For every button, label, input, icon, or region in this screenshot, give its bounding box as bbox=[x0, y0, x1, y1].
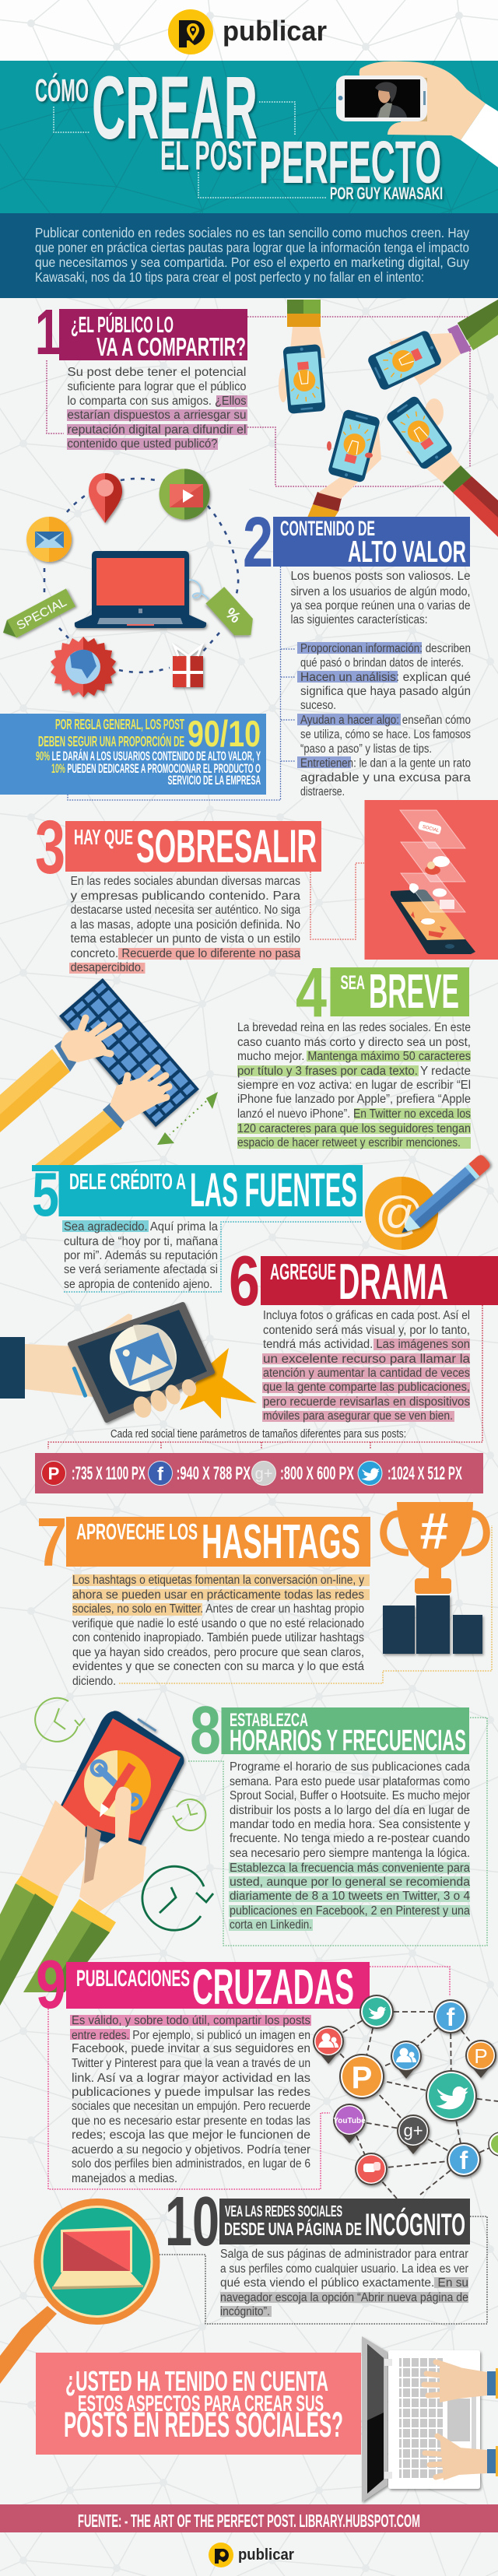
phone bbox=[391, 890, 475, 954]
node: twitter big bbox=[426, 2070, 477, 2122]
icon: twitter bbox=[358, 1462, 382, 1485]
icon: map pin bbox=[89, 473, 122, 523]
panel: social image sizes: :800 X 600 PX bbox=[280, 1463, 354, 1484]
illustration: phone, tools and clocks bbox=[0, 1698, 213, 2006]
text: step 7: ahora se pueden usar en prácticamente todas las redes bbox=[72, 1588, 364, 1602]
heading: step 1: 1 bbox=[35, 296, 61, 368]
text: step 4: mucho mejor. Mantenga máximo 50 caracteres bbox=[237, 1050, 471, 1063]
node: chat bbox=[355, 2153, 388, 2185]
icon: pinterest: P bbox=[48, 1464, 59, 1483]
node: pinterest big: P bbox=[352, 2061, 372, 2095]
icon: pinterest bbox=[42, 1462, 65, 1485]
text: step 9: redes; escoja las que mejor le funcionen de bbox=[72, 2129, 310, 2142]
dashed route bbox=[44, 479, 238, 672]
heading: step 2 bbox=[243, 503, 470, 582]
text: step 7: con contenido inapropiado. También puede utilizar hashtags bbox=[72, 1631, 364, 1644]
icon: facebook bbox=[148, 1462, 173, 1485]
icon: clock large bbox=[142, 1866, 213, 1930]
text: step 9: Facebook, puede invitar a sus seguidores en bbox=[72, 2042, 310, 2055]
icon: google plus bbox=[252, 1462, 275, 1485]
heading: step 1 bbox=[35, 296, 247, 368]
header logo: publicar bbox=[223, 15, 327, 47]
node: facebook bottom: f bbox=[460, 2146, 468, 2174]
node: pinterest small: P bbox=[474, 2044, 488, 2068]
icon: email bbox=[26, 517, 72, 562]
node: youtube bbox=[333, 2104, 366, 2143]
title: EL POST bbox=[160, 133, 256, 179]
text: step 2: Entretienen: le dan a la gente un rato bbox=[300, 757, 471, 770]
text: step 6: un excelente recurso para llamar la bbox=[263, 1353, 470, 1366]
text: step 4: espacio de hacer retweet y escribir menciones. bbox=[237, 1136, 461, 1149]
text: step 5: cultura de “hoy por ti, mañana bbox=[64, 1235, 218, 1248]
icon: clock medium bbox=[173, 1799, 205, 1830]
text: step 1: Su post debe tener el potencial bbox=[67, 366, 246, 379]
heading: step 4 bbox=[296, 954, 469, 1032]
panel: intro bbox=[0, 213, 498, 298]
text: step 2: distraerse. bbox=[300, 785, 345, 798]
text: step 6: atención y aumentar la cantidad de veces bbox=[263, 1367, 470, 1380]
heading: step 9: PUBLICACIONES bbox=[76, 1966, 190, 1992]
icon: globe badge bbox=[51, 637, 116, 697]
text: step 2: sirven a los usuarios de algún modo, bbox=[291, 585, 470, 598]
text: step 9: Twitter y Pinterest para que la vean a través de un bbox=[72, 2057, 310, 2070]
text: step 7: que ya hayan sido creados, pero procure que sean claros, bbox=[72, 1646, 364, 1659]
text: step 1: lo comparta con sus amigos. ¿Ellos bbox=[67, 395, 247, 408]
icon: percent tag bbox=[205, 587, 260, 644]
text: step 8: publicaciones en Facebook, 2 en Pinterest y una bbox=[230, 1904, 470, 1918]
phone bottom-left bbox=[307, 409, 381, 518]
footer logo: publicar bbox=[238, 2546, 294, 2564]
heading: step 10: 10 bbox=[165, 2183, 219, 2261]
illustration: magnifier with laptop bbox=[0, 2199, 160, 2384]
intro text bbox=[35, 225, 469, 285]
text: step 3: a las masas, adopte una posición definida. No bbox=[71, 918, 300, 932]
heading: step 10: VEA LAS REDES SOCIALES bbox=[225, 2203, 342, 2220]
node: google plus bbox=[397, 2114, 430, 2154]
text: step 6: que la gente comparte las publicaciones, bbox=[263, 1381, 470, 1394]
layers bbox=[400, 810, 465, 912]
text: step 7: evidentes y que se conecten con su marca y lo que está bbox=[72, 1660, 364, 1673]
text: step 2: suceso. bbox=[300, 699, 336, 712]
node: pinterest big bbox=[339, 2054, 384, 2099]
heading: step 7: APROVECHE LOS bbox=[76, 1520, 198, 1545]
text: step 10: qué esta viendo el público exactamente. En su bbox=[220, 2276, 468, 2290]
heading: step 6 bbox=[229, 1242, 498, 1321]
heading: step 10 bbox=[165, 2183, 470, 2261]
text: step 9: acuerdo a su negocio y objetivos. Podría tener bbox=[72, 2143, 310, 2157]
text: step 6: tendrá más actividad. Las imágenes son bbox=[263, 1338, 470, 1351]
illustration: hands on keyboard bbox=[0, 978, 218, 1165]
text: step 9: que no es necesario estar presente en todas las bbox=[72, 2114, 310, 2128]
callout: 90/10 rule: 90% LE DARÁN A LOS USUARIOS CONTENIDO DE ALTO VALOR, Y bbox=[36, 749, 261, 763]
heading: step 6: 6 bbox=[229, 1242, 260, 1321]
text: step 3: destacarse usted necesita ser auténtico. No siga bbox=[71, 904, 300, 917]
text: step 9: publicaciones y puede impulsar las redes bbox=[72, 2086, 310, 2099]
illustration: hand holding phone with Guy Kawasaki bbox=[336, 61, 498, 167]
node: people red bbox=[313, 2026, 344, 2064]
text: step 4: siempre en voz activa: en lugar de escribir “El bbox=[237, 1079, 471, 1092]
callout: 90/10 rule: SERVICIO DE LA EMPRESA bbox=[168, 773, 261, 788]
callout: closing question: ¿USTED HA TENIDO EN CUENTA bbox=[65, 2365, 328, 2397]
heading: step 5: DELE CRÉDITO A bbox=[69, 1168, 186, 1195]
icon: special ribbon bbox=[0, 588, 75, 642]
hands bbox=[0, 1787, 146, 2006]
panel: social image sizes: :735 X 1100 PX bbox=[72, 1463, 146, 1484]
tools icon bbox=[84, 1750, 151, 1817]
text: step 10 bbox=[160, 2216, 487, 2324]
icon: video bbox=[159, 469, 210, 520]
panel: social image sizes bbox=[35, 1453, 483, 1493]
heading: step 8: ESTABLEZCA bbox=[230, 1710, 308, 1731]
text: step 2: las siguientes características: bbox=[291, 613, 428, 626]
icon: gift bbox=[173, 646, 203, 687]
text: step 3: desapercibido. bbox=[71, 961, 144, 974]
text: step 10: navegador escoja la opción “Abrir nueva página de bbox=[220, 2291, 468, 2304]
text: step 8: frecuente. No tenga miedo a re-postear cuando bbox=[230, 1832, 470, 1845]
text: step 1: contenido que usted publicó? bbox=[67, 437, 218, 451]
text: step 2: “paso a paso” y listas de tips. bbox=[300, 742, 432, 756]
text: step 5: se verá seriamente afectada si bbox=[64, 1263, 218, 1276]
title: CREAR bbox=[92, 58, 258, 158]
heading: step 8 bbox=[190, 1693, 469, 1768]
header logo bbox=[168, 9, 327, 54]
text: step 9: entre redes. Por ejemplo, si publicó un imagen en bbox=[72, 2029, 310, 2042]
callout: 90/10 rule: 90/10 bbox=[188, 713, 261, 754]
icon: google plus: g+ bbox=[255, 1465, 272, 1483]
icon: laptop bbox=[75, 551, 209, 628]
text: step 2: significa que haya pasado algún bbox=[300, 685, 471, 698]
text: step 9: solo dos perfiles bien administrados, en lugar de 6 bbox=[72, 2157, 310, 2171]
text: step 4: Y redacte bbox=[420, 1065, 471, 1078]
node: green partial bbox=[489, 2132, 498, 2156]
icon: clock small bbox=[35, 1698, 85, 1742]
text: step 3: En las redes sociales abundan diversas marcas bbox=[71, 875, 300, 888]
node: youtube: YouTube bbox=[333, 2117, 366, 2125]
network connectors bbox=[328, 2012, 498, 2199]
heading: step 2: 2 bbox=[243, 503, 273, 582]
illustration: hand with image phone bbox=[0, 1304, 257, 1420]
callout: 90/10 rule: 10% PUEDEN DEDICARSE A PROMOCIONAR EL PRODUCTO O bbox=[51, 761, 261, 776]
text: step 5: se apropia de contenido ajeno. bbox=[64, 1278, 212, 1291]
footer: source band bbox=[0, 2504, 498, 2532]
text: step 6: contenido será más visual y, por lo tanto, bbox=[263, 1324, 470, 1337]
heading: step 9 bbox=[36, 1946, 450, 2023]
text: step 6: móviles para asegurar que se ven bien. bbox=[263, 1409, 453, 1423]
upper arm and hand bbox=[0, 1018, 119, 1132]
illustration: four hands with idea phones bbox=[247, 300, 498, 537]
text: step 9: sociales que necesitan un empujón. Pero recuerde bbox=[72, 2100, 310, 2113]
illustration: social network nodes bbox=[313, 1995, 498, 2199]
text: step 8: diariamente de 8 a 10 tweets en Twitter, 3 o 4 bbox=[230, 1890, 470, 1903]
node: facebook bottom bbox=[447, 2143, 481, 2177]
text: step 7: sociales, no solo en Twitter. Antes de crear un hashtag propio bbox=[72, 1602, 364, 1616]
heading: step 6: AGREGUE bbox=[270, 1260, 336, 1285]
heading: step 2: CONTENIDO DE bbox=[280, 517, 375, 540]
phone bbox=[51, 1711, 184, 1851]
text: step 4: caso cuanto más corto y directo sea un post, bbox=[237, 1036, 471, 1049]
icon: burst bbox=[180, 1348, 257, 1419]
text: step 5: Sea agradecido. Aquí prima la bbox=[64, 1220, 218, 1234]
text: step 8: Programe el horario de sus publicaciones cada bbox=[230, 1760, 470, 1774]
illustration: laptop from above with hands bbox=[362, 2336, 498, 2502]
text: step 7: verifique que nadie lo esté usando o que no esté relacionado bbox=[72, 1617, 364, 1630]
illustration: hashtag trophy bbox=[383, 1502, 486, 1654]
text: step 10: a sus perfiles como cualquier usuario. La idea es ver bbox=[220, 2262, 468, 2276]
dotted connectors in header bbox=[54, 102, 327, 198]
heading: step 1: ¿EL PÚBLICO LO bbox=[71, 311, 174, 338]
text: step 8: corta en Linkedin. bbox=[230, 1918, 312, 1932]
node: twitter teal bbox=[359, 1995, 394, 2029]
text: step 4: por título y 3 frases por cada texto. bbox=[237, 1065, 418, 1078]
lower arm and hand bbox=[35, 1068, 169, 1165]
text: step 3 bbox=[69, 863, 364, 974]
text: step 6: pero recuerde revisarlas en dispositivos bbox=[263, 1395, 470, 1409]
panel: social media layered phone bbox=[364, 800, 498, 960]
text: step 2: agradable y una excusa para bbox=[300, 771, 471, 784]
text: step 8: semana. Para esto puede usar plataformas como bbox=[230, 1775, 470, 1788]
footer logo bbox=[209, 2543, 294, 2567]
text: step 4: La brevedad reina en las redes sociales. En este bbox=[237, 1021, 471, 1034]
text: step 9: manejados a medias. bbox=[72, 2172, 177, 2185]
heading: step 7: 7 bbox=[37, 1504, 67, 1581]
node: pinterest small bbox=[465, 2040, 496, 2078]
heading: step 7 bbox=[37, 1504, 370, 1581]
text: step 7: diciendo. bbox=[72, 1675, 116, 1688]
text: step 1: suficiente para lograr que el público bbox=[67, 380, 246, 394]
text: step 8: distribuir los posts a lo largo del día en lugar de bbox=[230, 1804, 470, 1817]
text: step 8 bbox=[188, 1718, 487, 1946]
text: step 2: Ayudan a hacer algo: enseñan cómo bbox=[300, 714, 471, 727]
text: step 9: link. Así va a lograr mayor actividad en las bbox=[72, 2072, 310, 2085]
text: step 10: Salga de sus páginas de administrador para entrar bbox=[220, 2248, 468, 2261]
icon: special ribbon: SPECIAL bbox=[15, 595, 69, 633]
heading: step 5: 5 bbox=[32, 1160, 59, 1229]
heading: step 3 bbox=[35, 805, 321, 890]
illustration: hashtag trophy: # bbox=[420, 1502, 448, 1560]
heading: step 1: VA A COMPARTIR? bbox=[96, 332, 246, 361]
title: CÓMO bbox=[35, 72, 89, 108]
heading: step 10: DESDE UNA PÁGINA DE bbox=[224, 2218, 362, 2239]
text: step 2 bbox=[68, 567, 471, 800]
text: step 8: mandar todo en media hora. Sea consistente y bbox=[230, 1818, 470, 1831]
text: image sizes caption: Cada red social tiene parámetros de tamaños diferentes para sus posts: bbox=[110, 1428, 406, 1441]
text: step 8: usted, aunque por lo general se recomienda bbox=[230, 1876, 470, 1889]
heading: step 7: HASHTAGS bbox=[202, 1515, 360, 1569]
text: step 6: Incluya fotos o gráficas en cada post. Así el bbox=[263, 1309, 470, 1322]
text: image sizes caption bbox=[48, 1305, 482, 1449]
text: step 2: Hacen un análisis: explican qué bbox=[300, 671, 471, 684]
icon: facebook: f bbox=[157, 1464, 164, 1485]
text: step 8: Sprout Social, Buffer o Hootsuite. Es mucho mejor bbox=[230, 1789, 470, 1802]
teal header banner bbox=[0, 61, 498, 213]
node: facebook top bbox=[433, 1999, 468, 2034]
text: step 3: tema establecer un punto de vista o un estilo bbox=[71, 932, 300, 946]
heading: step 4: 4 bbox=[296, 954, 327, 1032]
illustration: laptop with icons bbox=[0, 469, 260, 697]
text: step 9: Es válido, y sobre todo útil, compartir los posts bbox=[72, 2014, 310, 2027]
text: step 10: incógnito”. bbox=[220, 2305, 270, 2318]
heading: step 4: SEA bbox=[341, 972, 365, 994]
heading: step 9: CRUZADAS bbox=[192, 1959, 354, 2015]
intro text: Kawasaki, nos da 10 tips para crear el post perfecto y no fallar en el intento: bbox=[35, 269, 424, 285]
panel: social image sizes: :940 X 788 PX bbox=[176, 1463, 251, 1484]
heading: step 5 bbox=[32, 1160, 363, 1229]
callout: 90/10 rule bbox=[0, 713, 266, 795]
text: step 3: concreto. Recuerde que lo diferente no pasa bbox=[71, 947, 300, 960]
text: step 6 bbox=[262, 1309, 470, 1423]
phone right-bottom bbox=[385, 395, 498, 537]
heading: step 9: 9 bbox=[36, 1946, 66, 2023]
text: step 2: qué pasó o brindan datos de interés. bbox=[300, 656, 464, 669]
text: step 4: 120 caracteres para que los seguidores tengan bbox=[237, 1122, 471, 1135]
heading: step 3: 3 bbox=[35, 805, 65, 890]
text: step 2: Los buenos posts son valiosos. Le bbox=[291, 570, 470, 583]
text: step 5: por mi”. Además su reputación bbox=[64, 1249, 218, 1262]
text: step 2: Proporcionan información: describen bbox=[300, 642, 471, 655]
illustration: at sign and pencil: @ bbox=[375, 1188, 424, 1241]
phone top bbox=[279, 300, 326, 414]
phone right bbox=[366, 300, 498, 391]
text: step 8: Establezca la frecuencia más conveniente para bbox=[230, 1862, 470, 1875]
text: step 4 bbox=[237, 1021, 471, 1149]
callout: closing question bbox=[36, 2353, 361, 2455]
callout: 90/10 rule: DEBEN SEGUIR UNA PROPORCIÓN DE bbox=[38, 733, 184, 749]
node: google plus: g+ bbox=[403, 2121, 423, 2140]
node: people blue bbox=[391, 2041, 422, 2079]
callout: 90/10 rule: POR REGLA GENERAL, LOS POST bbox=[55, 717, 184, 732]
callout: closing question: ESTOS ASPECTOS PARA CREAR SUS bbox=[78, 2392, 324, 2416]
hands on laptop bbox=[424, 2360, 498, 2480]
heading: step 8: 8 bbox=[190, 1693, 221, 1768]
heading: step 3: SOBRESALIR bbox=[136, 820, 317, 872]
illustration: at sign and pencil bbox=[365, 1153, 492, 1250]
text: step 3: y empresas publicando contenido. Para bbox=[71, 890, 300, 903]
text: step 4: iPhone fue lanzado por Apple”, prefiera “Apple bbox=[237, 1093, 471, 1106]
text: step 1: reputación digital para difundir el bbox=[67, 423, 246, 437]
text: step 1: estarían dispuestos a arriesgar su bbox=[67, 409, 246, 422]
arrow: size arrow bbox=[157, 1092, 218, 1145]
text: step 7: Los hashtags o etiquetas fomentan la conversación on-line, y bbox=[72, 1574, 364, 1587]
text: step 8: sea necesario pero siempre mantenga la lógica. bbox=[230, 1847, 470, 1860]
panel: social media layered phone: SOCIAL bbox=[422, 825, 440, 834]
title bbox=[35, 58, 443, 203]
node: facebook top: f bbox=[447, 2003, 455, 2031]
text: step 5 bbox=[62, 1220, 361, 1292]
heading: step 3: HAY QUE bbox=[74, 825, 133, 849]
text: step 1 bbox=[47, 360, 247, 451]
icon: percent tag: % bbox=[222, 605, 244, 627]
text: step 9 bbox=[48, 2009, 330, 2189]
text: step 4: lanzó el nuevo iPhone”. En Twitter no exceda los bbox=[237, 1107, 471, 1121]
text: step 7 bbox=[72, 1525, 492, 1688]
text: step 2: ya sea porque reúnen una o varias de bbox=[291, 599, 470, 612]
